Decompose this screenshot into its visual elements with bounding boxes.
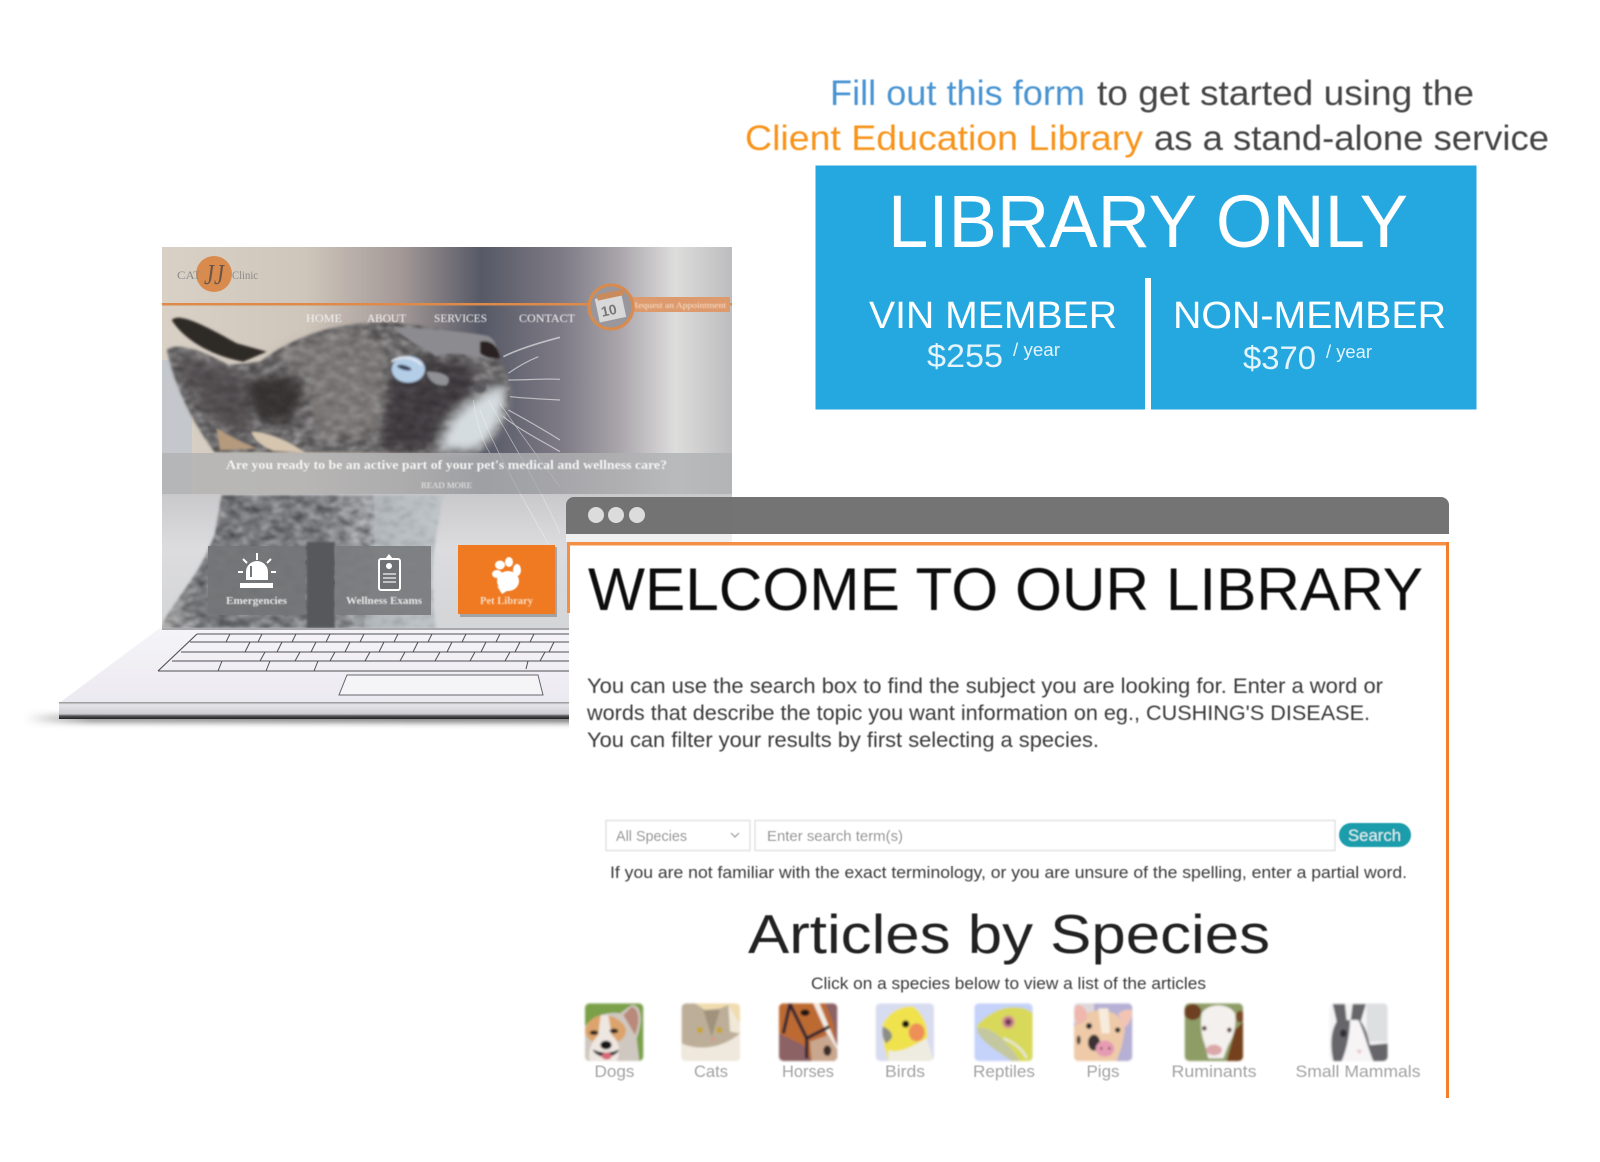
appointment button — [589, 285, 730, 329]
browser title bar — [566, 497, 1449, 534]
species: cats: Cats — [694, 1062, 728, 1081]
search hint: If you are not familiar with the exact terminology, or you are unsure of the spelling, enter a partial word. — [610, 863, 1407, 882]
browser content panel — [567, 542, 1449, 1162]
search input: Enter search term(s) — [767, 828, 903, 845]
non-member price: NON-MEMBER — [1173, 295, 1446, 337]
site header line — [162, 303, 732, 306]
non-member price — [1173, 295, 1446, 376]
search input — [755, 820, 1335, 850]
panel: pricing box — [816, 166, 1476, 410]
species: reptiles: Reptiles — [973, 1062, 1035, 1081]
appointment button: Request an Appointment — [632, 301, 727, 310]
site navigation: HOME — [306, 313, 342, 325]
search button — [1339, 823, 1411, 847]
site logo: CAT — [177, 268, 202, 282]
species: pigs: Pigs — [1086, 1062, 1120, 1081]
site banner: Are you ready to be an active part of your pet's medical and wellness care? — [226, 457, 667, 472]
species: ruminants — [1172, 1003, 1256, 1081]
species: small mammals: Small Mammals — [1296, 1062, 1420, 1081]
species: dogs — [585, 1003, 643, 1081]
VIN member price — [869, 295, 1117, 374]
species dropdown — [606, 820, 750, 850]
species: horses: Horses — [782, 1062, 834, 1081]
search button: Search — [1348, 826, 1401, 845]
heading: form invitation: Fill out this form — [830, 74, 1085, 113]
intro paragraph: You can filter your results by first selecting a species. — [587, 729, 1099, 752]
browser window — [566, 497, 1449, 1162]
heading: form invitation — [745, 74, 1549, 158]
species: ruminants: Ruminants — [1172, 1062, 1256, 1081]
site navigation: ABOUT — [367, 313, 406, 325]
VIN member price: / year — [1013, 340, 1060, 360]
site navigation: SERVICES — [434, 313, 487, 325]
species: cats — [682, 1003, 740, 1081]
site logo: JJ — [204, 260, 225, 291]
whiskers — [473, 337, 560, 547]
site banner: READ MORE — [421, 481, 472, 490]
articles subheading: Click on a species below to view a list of the articles — [811, 974, 1206, 993]
button: pet library: Pet Library — [480, 595, 533, 607]
button: pet library — [458, 545, 557, 617]
non-member price: / year — [1326, 342, 1372, 362]
species: dogs: Dogs — [594, 1062, 634, 1081]
heading: form invitation: as a stand-alone service — [1154, 119, 1549, 158]
heading: form invitation: Client Education Library — [745, 119, 1144, 158]
species: birds — [876, 1003, 934, 1081]
appointment button: 10 — [600, 301, 618, 320]
species: pigs — [1074, 1003, 1132, 1081]
laptop base — [59, 626, 740, 719]
intro paragraph: You can use the search box to find the subject you are looking for. Enter a word or — [587, 675, 1383, 698]
VIN member price: $255 — [927, 338, 1003, 374]
site banner — [162, 453, 732, 494]
species: reptiles — [973, 1003, 1035, 1081]
pricing title: LIBRARY ONLY — [888, 180, 1408, 263]
button: emergencies — [208, 546, 305, 615]
VIN member price: VIN MEMBER — [869, 295, 1117, 337]
non-member price: $370 — [1243, 340, 1316, 376]
intro paragraph: words that describe the topic you want information on eg., CUSHING'S DISEASE. — [586, 702, 1370, 725]
species dropdown: All Species — [616, 828, 687, 845]
site navigation: CONTACT — [519, 313, 575, 325]
species: horses — [779, 1003, 837, 1081]
intro paragraph — [586, 675, 1383, 752]
species: birds: Birds — [885, 1062, 925, 1081]
cat photo — [160, 318, 560, 628]
button: wellness exams — [335, 546, 431, 615]
site navigation — [306, 314, 576, 323]
heading: form invitation: to get started using the — [1097, 74, 1474, 113]
site logo — [177, 256, 258, 292]
site logo: Clinic — [232, 268, 258, 282]
touchpad — [339, 675, 543, 695]
species: small mammals — [1296, 1003, 1420, 1081]
laptop screen — [160, 247, 732, 628]
button: emergencies: Emergencies — [226, 595, 288, 607]
welcome heading: WELCOME TO OUR LIBRARY — [588, 556, 1423, 623]
keyboard — [158, 634, 575, 671]
articles heading: Articles by Species — [748, 903, 1270, 965]
button: wellness exams: Wellness Exams — [346, 595, 423, 607]
laptop illustration — [25, 247, 740, 723]
laptop shadow — [25, 714, 575, 723]
